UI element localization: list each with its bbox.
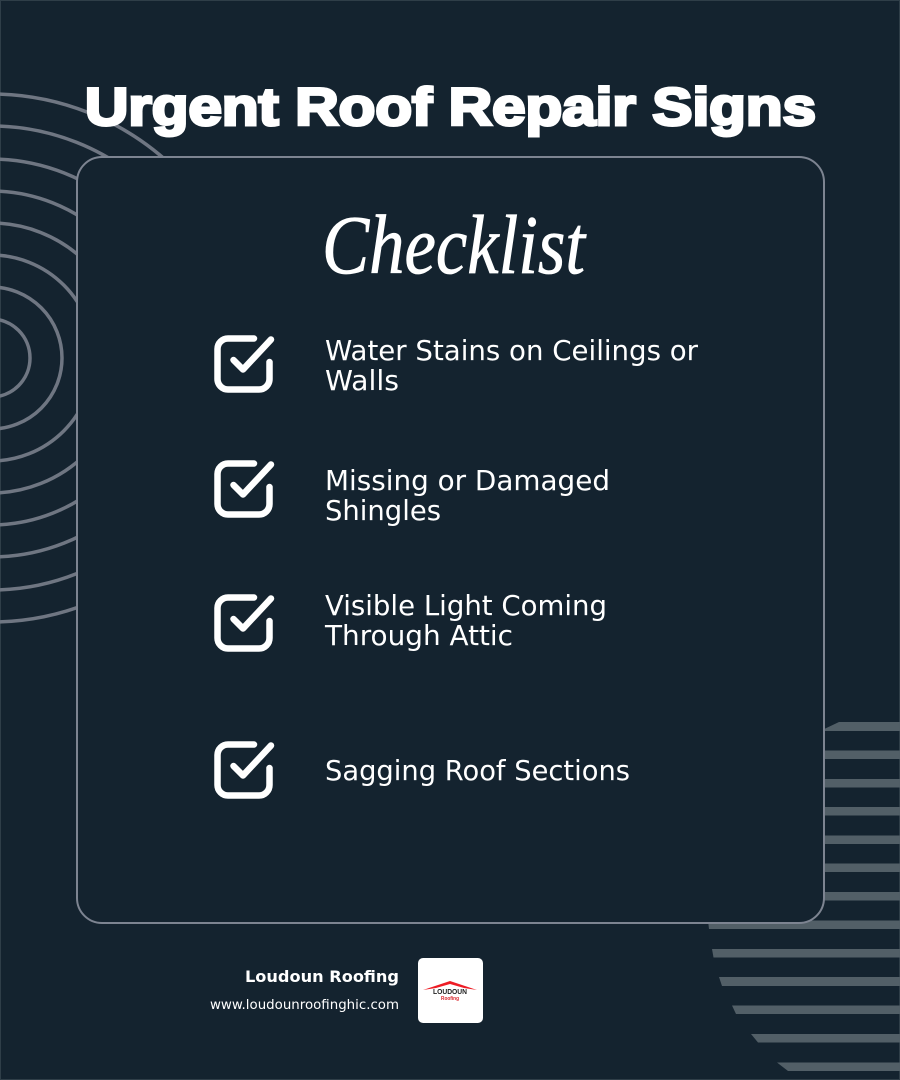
icon: roof: [423, 981, 477, 990]
item 1: water stains: [218, 335, 699, 397]
title: Urgent Roof Repair Signs: [85, 78, 816, 137]
item text 3: Visible Light Coming: [325, 590, 607, 622]
decorative striped circle: [708, 722, 900, 1071]
icon: checkbox 3: [218, 598, 271, 648]
item text 4: Sagging Roof Sections: [325, 755, 630, 787]
item text 1: Water Stains on Ceilings or: [325, 335, 699, 367]
logo wordmark: LOUDOUN: [433, 989, 467, 996]
item 3: visible light: [218, 590, 607, 652]
footer company name: Loudoun Roofing: [245, 967, 399, 986]
logo subtext: Roofing: [441, 996, 459, 1002]
footer website: www.loudounroofinghic.com: [210, 998, 399, 1013]
panel: checklist card: [77, 157, 824, 923]
decorative concentric arcs: [0, 94, 255, 622]
item text 3: Through Attic: [324, 620, 513, 652]
item 4: sagging roof: [218, 744, 630, 796]
icon: checkbox 4: [218, 744, 271, 796]
item text 1: Walls: [325, 365, 399, 397]
logo badge: [418, 958, 483, 1023]
item 2: missing shingles: [218, 464, 610, 527]
item text 2: Shingles: [325, 495, 441, 527]
icon: checkbox 2: [218, 464, 271, 514]
icon: checkbox 1: [218, 338, 271, 390]
item text 2: Missing or Damaged: [325, 465, 610, 497]
checklist heading: Checklist: [322, 199, 587, 292]
